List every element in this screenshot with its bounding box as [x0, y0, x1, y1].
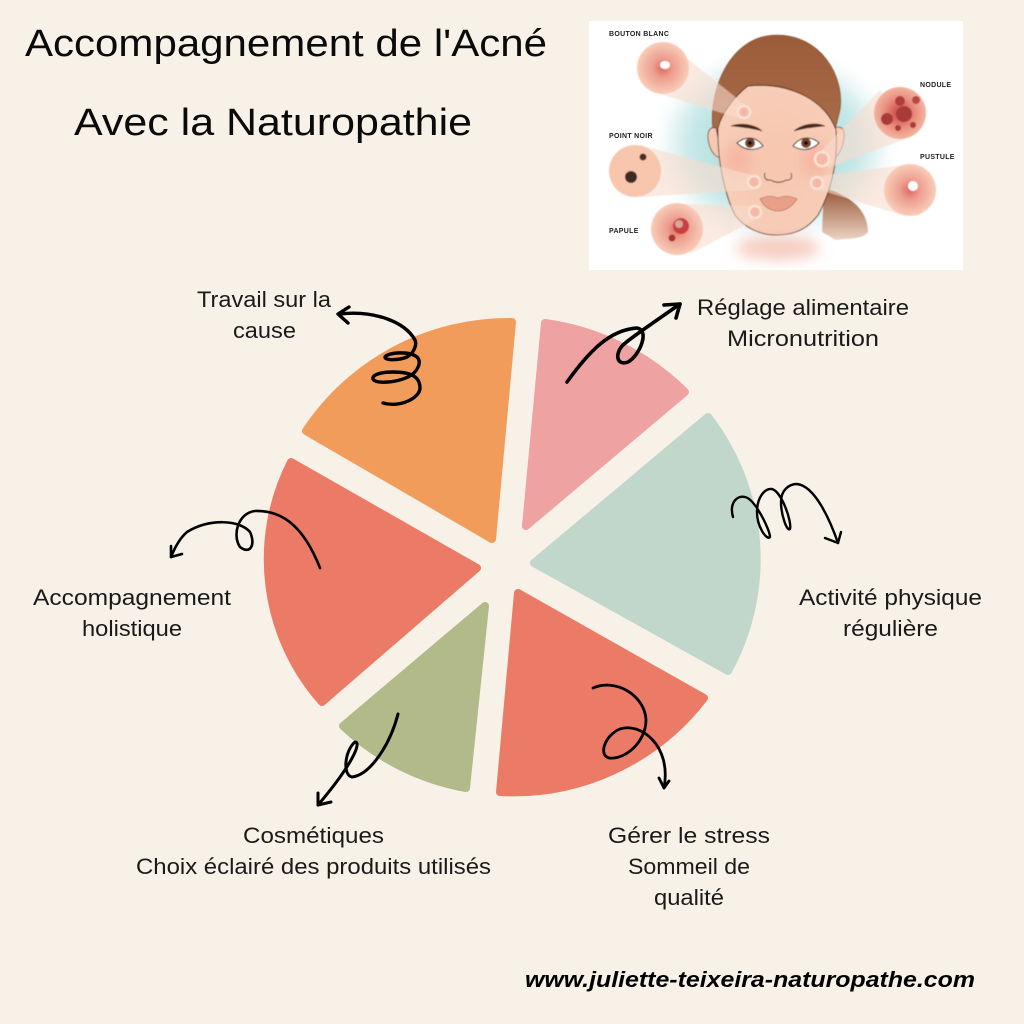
callout: pustule	[884, 164, 936, 216]
illustration: face with acne types	[589, 21, 963, 270]
label: gérer le stress	[608, 823, 770, 910]
label: accompagnement holistique: Accompagnement	[33, 585, 231, 610]
arrow: cosmétiques	[318, 714, 398, 805]
segment: travail sur la cause	[306, 322, 512, 539]
arrow: réglage alimentaire	[567, 304, 680, 382]
acne type labels: PAPULE	[609, 228, 639, 235]
acne type labels	[609, 31, 955, 235]
hair	[712, 35, 841, 134]
teal glow behind face	[657, 50, 893, 240]
cheeks	[724, 142, 752, 178]
segment: cosmétiques	[343, 606, 485, 788]
label: gérer le stress: Gérer le stress	[608, 823, 770, 848]
arrow: activité physique	[732, 484, 841, 543]
label: cosmétiques: Choix éclairé des produits utilisés	[136, 854, 491, 879]
label: accompagnement holistique: holistique	[82, 616, 182, 641]
nose	[764, 173, 792, 182]
website url: www.juliette-teixeira-naturopathe.com	[525, 967, 975, 992]
label: gérer le stress: Sommeil de	[628, 854, 750, 879]
label: cosmétiques: Cosmétiques	[243, 823, 384, 848]
acne type labels: POINT NOIR	[609, 133, 653, 140]
callout: point noir	[609, 145, 661, 197]
label: travail sur la cause	[197, 287, 332, 343]
neck shadow	[736, 236, 820, 260]
title: Accompagnement de l'Acné	[25, 23, 547, 65]
small rings on face	[738, 106, 829, 218]
label: activité physique: régulière	[843, 616, 938, 641]
lips	[760, 196, 797, 211]
magnifier beams	[640, 43, 905, 254]
acne type labels: PUSTULE	[920, 154, 955, 161]
eyes	[737, 138, 763, 149]
acne type labels: BOUTON BLANC	[609, 31, 669, 38]
segment: gérer le stress	[500, 593, 704, 792]
label: activité physique	[799, 585, 982, 641]
callout: nodule	[874, 87, 926, 139]
face	[718, 85, 836, 235]
label: réglage alimentaire	[697, 295, 909, 351]
segment: activité physique	[534, 417, 757, 671]
arrow: travail sur la cause	[338, 307, 420, 404]
eyebrows	[731, 124, 762, 131]
label: travail sur la cause: Travail sur la	[197, 287, 332, 312]
title	[25, 23, 547, 144]
label: activité physique: Activité physique	[799, 585, 982, 610]
label: accompagnement holistique	[33, 585, 231, 641]
segment: réglage alimentaire	[526, 323, 685, 526]
arrow: gérer le stress	[593, 685, 669, 788]
label: travail sur la cause: cause	[233, 318, 296, 343]
label: cosmétiques	[136, 823, 491, 879]
title: Avec la Naturopathie	[74, 102, 472, 144]
callout: bouton blanc	[637, 42, 689, 94]
pie chart	[268, 322, 757, 792]
callout: papule	[651, 203, 703, 255]
segment: accompagnement holistique	[268, 462, 477, 702]
arrow: accompagnement holistique	[171, 511, 320, 568]
ears	[708, 128, 722, 158]
label: réglage alimentaire: Micronutrition	[727, 326, 879, 351]
ponytail	[822, 188, 868, 240]
label: réglage alimentaire: Réglage alimentaire	[697, 295, 909, 320]
acne type labels: NODULE	[920, 82, 951, 89]
label: gérer le stress: qualité	[654, 885, 724, 910]
